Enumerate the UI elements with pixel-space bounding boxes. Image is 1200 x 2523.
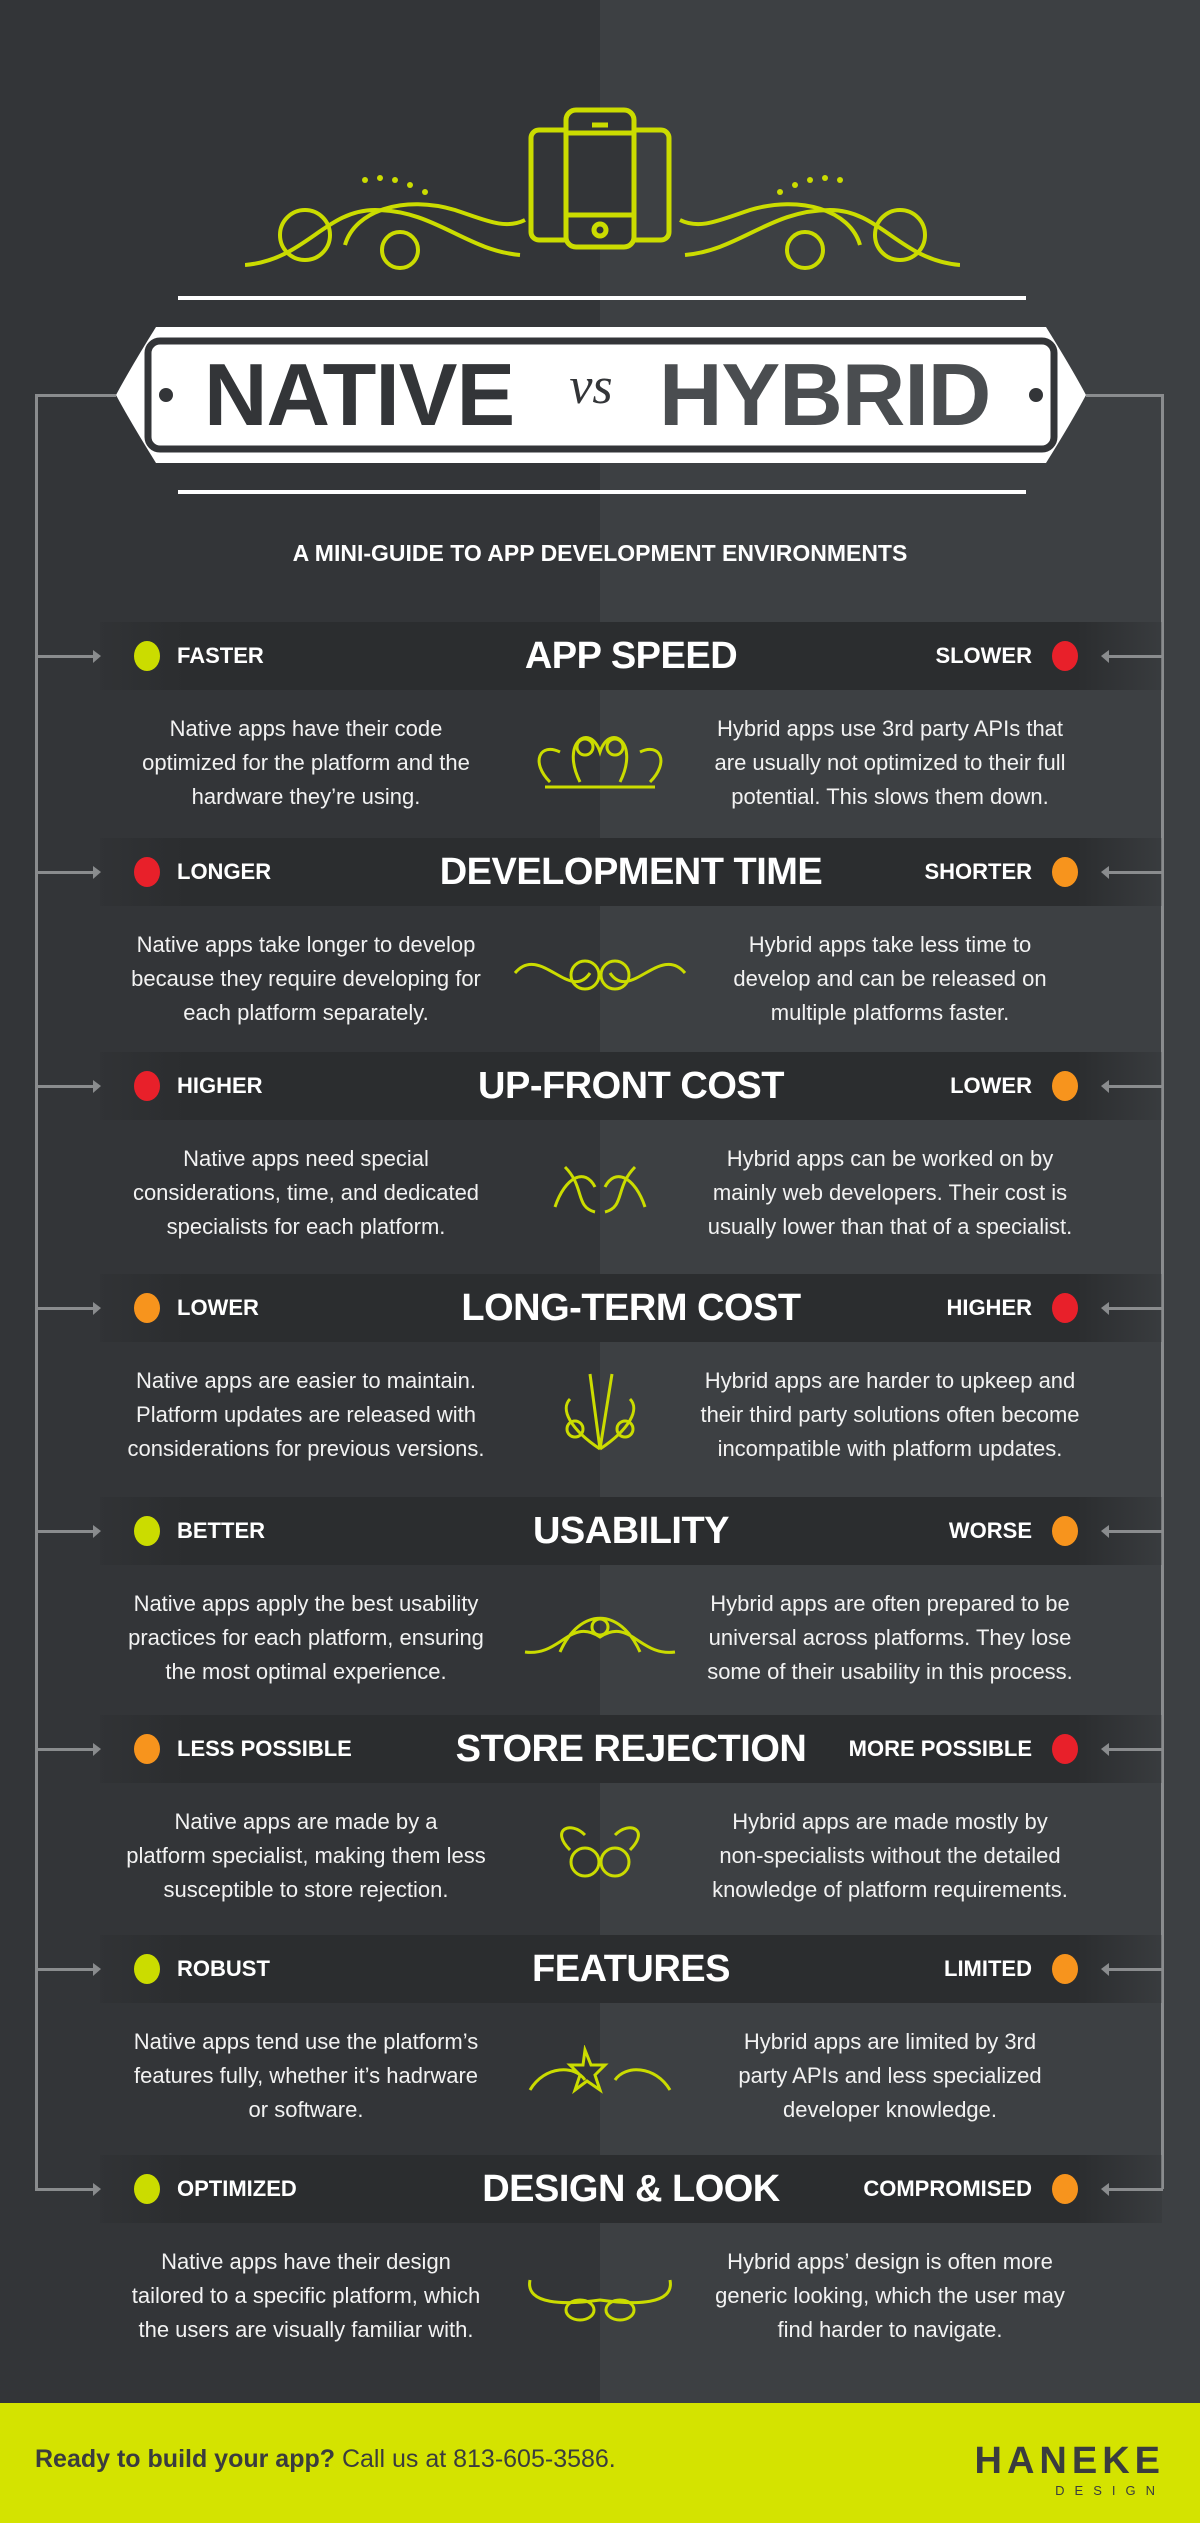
row: up-front cost: usually lower than that of a specialist.	[708, 1214, 1072, 1239]
row: features: Native apps tend use the platform’s	[134, 2029, 478, 2054]
row: features: LIMITED	[944, 1956, 1032, 1981]
row: design & look: generic looking, which the user may	[715, 2283, 1065, 2308]
row: development time: LONGER	[177, 859, 271, 884]
background right half	[600, 0, 1200, 2403]
row: up-front cost: mainly web developers. Their cost is	[713, 1180, 1067, 1205]
row: long-term cost	[38, 1274, 1162, 1461]
row: app speed: Hybrid apps use 3rd party APIs that	[717, 716, 1063, 741]
row: features	[38, 1935, 1162, 2122]
row: features: ROBUST	[177, 1956, 270, 1981]
row: features: FEATURES	[532, 1948, 730, 1990]
row: usability: the most optimal experience.	[165, 1659, 447, 1684]
subtitle: A MINI-GUIDE TO APP DEVELOPMENT ENVIRONMENTS	[293, 540, 907, 566]
ornament: header flourishes	[245, 175, 960, 270]
row: usability: universal across platforms. They lose	[709, 1625, 1071, 1650]
row: up-front cost: Native apps need special	[183, 1146, 429, 1171]
row: development time: develop and can be released on	[733, 966, 1047, 991]
row: long-term cost: Platform updates are released with	[136, 1402, 476, 1427]
row: usability: USABILITY	[533, 1510, 729, 1552]
row: design & look: DESIGN & LOOK	[482, 2168, 780, 2210]
row: store rejection: knowledge of platform requirements.	[712, 1877, 1068, 1902]
row: up-front cost: HIGHER	[177, 1073, 263, 1098]
row: features: party APIs and less specialized	[738, 2063, 1042, 2088]
footer text: Ready to build your app? Call us at 813-605-3586.	[35, 2445, 616, 2473]
row: store rejection: Native apps are made by a	[175, 1809, 437, 1834]
row: store rejection: LESS POSSIBLE	[177, 1736, 352, 1761]
row: long-term cost: Native apps are easier to maintain.	[136, 1368, 476, 1393]
logo: DESIGN	[1055, 2483, 1165, 2498]
footer	[0, 2403, 1200, 2523]
row: design & look: Native apps have their design	[161, 2249, 451, 2274]
row: up-front cost: LOWER	[950, 1073, 1032, 1098]
row: development time: Native apps take longer to develop	[137, 932, 475, 957]
title banner: vs	[569, 358, 613, 415]
row: long-term cost: LONG-TERM COST	[461, 1287, 801, 1329]
top rule	[178, 296, 1026, 300]
row: app speed: potential. This slows them down.	[731, 784, 1049, 809]
title banner: NATIVE	[204, 345, 514, 444]
row: app speed: SLOWER	[935, 643, 1032, 668]
row: app speed: APP SPEED	[525, 635, 737, 677]
brackets	[35, 394, 116, 2189]
row: store rejection: non-specialists without the detailed	[719, 1843, 1061, 1868]
row: features: or software.	[249, 2097, 363, 2122]
row: app speed: hardware they’re using.	[192, 784, 420, 809]
row: up-front cost: considerations, time, and dedicated	[133, 1180, 479, 1205]
row: usability: some of their usability in this process.	[707, 1659, 1073, 1684]
row: usability	[38, 1497, 1162, 1684]
bottom rule	[178, 490, 1026, 494]
row: store rejection	[38, 1715, 1162, 1902]
row: store rejection: platform specialist, making them less	[126, 1843, 486, 1868]
title banner: HYBRID	[659, 345, 990, 444]
row: long-term cost: HIGHER	[946, 1295, 1032, 1320]
row: app speed: Native apps have their code	[170, 716, 442, 741]
row: long-term cost: their third party solutions often become	[700, 1402, 1080, 1427]
row: usability: practices for each platform, ensuring	[128, 1625, 484, 1650]
row: usability: BETTER	[177, 1518, 265, 1543]
row: design & look: OPTIMIZED	[177, 2176, 297, 2201]
icon: phones	[528, 108, 672, 250]
title banner	[116, 327, 1086, 463]
row: app speed: FASTER	[177, 643, 264, 668]
row: app speed	[38, 622, 1162, 809]
row: up-front cost	[38, 1052, 1162, 1239]
row: usability: WORSE	[949, 1518, 1032, 1543]
row: design & look: tailored to a specific platform, which	[132, 2283, 480, 2308]
logo: HANEKE	[975, 2440, 1165, 2482]
row: long-term cost: Hybrid apps are harder to upkeep and	[705, 1368, 1075, 1393]
row: store rejection: MORE POSSIBLE	[849, 1736, 1032, 1761]
row: usability: Hybrid apps are often prepared to be	[710, 1591, 1070, 1616]
row: design & look: COMPROMISED	[863, 2176, 1032, 2201]
row: usability: Native apps apply the best usability	[134, 1591, 478, 1616]
row: design & look	[35, 2155, 1163, 2342]
row: app speed: are usually not optimized to their full	[715, 750, 1065, 775]
row: development time: each platform separately.	[183, 1000, 429, 1025]
row: design & look: Hybrid apps’ design is often more	[727, 2249, 1053, 2274]
row: long-term cost: considerations for previous versions.	[127, 1436, 485, 1461]
row: development time: because they require developing for	[131, 966, 481, 991]
row: development time	[38, 838, 1162, 1025]
row: long-term cost: incompatible with platform updates.	[718, 1436, 1062, 1461]
row: store rejection: STORE REJECTION	[456, 1728, 806, 1770]
row: development time: Hybrid apps take less time to	[749, 932, 1031, 957]
row: development time: multiple platforms faster.	[771, 1000, 1009, 1025]
row: features: Hybrid apps are limited by 3rd	[744, 2029, 1036, 2054]
row: store rejection: Hybrid apps are made mostly by	[732, 1809, 1048, 1834]
row: store rejection: susceptible to store rejection.	[164, 1877, 448, 1902]
row: design & look: find harder to navigate.	[777, 2317, 1003, 2342]
row: up-front cost: Hybrid apps can be worked on by	[727, 1146, 1053, 1171]
row: development time: DEVELOPMENT TIME	[440, 851, 822, 893]
row: features: features fully, whether it’s hadrware	[134, 2063, 478, 2088]
row: up-front cost: specialists for each platform.	[167, 1214, 445, 1239]
row: development time: SHORTER	[924, 859, 1032, 884]
row: app speed: optimized for the platform and the	[142, 750, 470, 775]
row: features: developer knowledge.	[783, 2097, 997, 2122]
row: up-front cost: UP-FRONT COST	[478, 1065, 784, 1107]
row: design & look: the users are visually familiar with.	[138, 2317, 474, 2342]
row: long-term cost: LOWER	[177, 1295, 259, 1320]
